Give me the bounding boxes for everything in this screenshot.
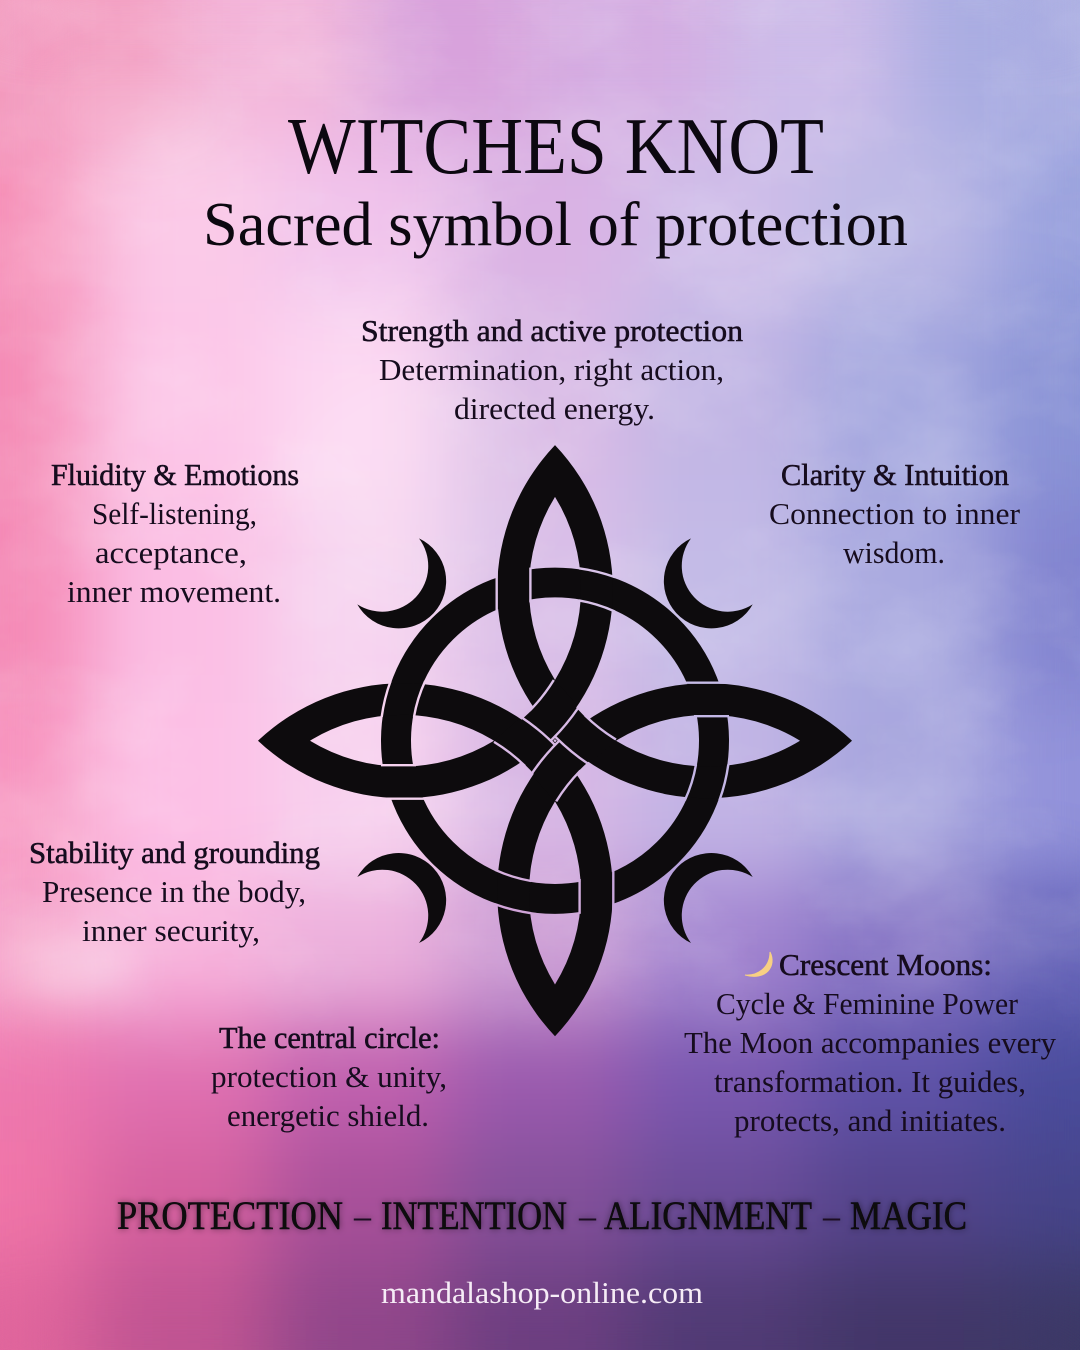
website footer: mandalashop-online.com xyxy=(381,1275,703,1310)
crescent bottom left xyxy=(357,853,446,943)
subtitle: Sacred symbol of protection xyxy=(203,191,908,259)
crescent bottom right xyxy=(664,853,753,943)
text block: clarity xyxy=(769,457,1021,570)
text block: central circle: energetic shield. xyxy=(227,1098,429,1133)
text block: crescent moons: The Moon accompanies every xyxy=(684,1025,1056,1060)
left lens xyxy=(258,683,558,798)
text block: crescent moons: Crescent Moons: xyxy=(779,947,992,982)
text block: crescent moons: protects, and initiates. xyxy=(734,1103,1006,1138)
text block: clarity: Connection to inner xyxy=(769,496,1021,531)
tagline: INTENTION xyxy=(381,1193,567,1238)
text block: fluidity: acceptance, xyxy=(95,535,247,570)
text block: strength: Determination, right action, xyxy=(379,352,724,387)
bottom lens xyxy=(497,738,613,1036)
crescent top left xyxy=(357,538,446,628)
text block: clarity: Clarity & Intuition xyxy=(781,457,1009,492)
text block: strength xyxy=(361,313,744,426)
text block: stability xyxy=(29,835,320,948)
top lens xyxy=(497,445,613,744)
tagline: ALIGNMENT xyxy=(604,1193,812,1238)
text block: fluidity: Fluidity & Emotions xyxy=(51,457,299,492)
text block: stability: Stability and grounding xyxy=(29,835,320,870)
text block: strength: Strength and active protection xyxy=(361,313,744,348)
text block: fluidity: Self-listening, xyxy=(92,496,257,531)
text block: central circle xyxy=(211,1020,447,1133)
tagline xyxy=(117,1193,967,1238)
tagline: – xyxy=(822,1193,841,1238)
icon: crescent moon xyxy=(745,952,772,976)
text block: central circle: protection & unity, xyxy=(211,1059,447,1094)
text block: clarity: wisdom. xyxy=(843,535,945,570)
text block: stability: inner security, xyxy=(82,913,260,948)
crescent top right xyxy=(664,538,753,628)
text block: strength: directed energy. xyxy=(454,391,655,426)
text block: stability: Presence in the body, xyxy=(42,874,306,909)
text block: crescent moons xyxy=(684,947,1056,1138)
right lens xyxy=(552,683,852,798)
witches knot symbol xyxy=(258,445,852,1036)
text block: fluidity: inner movement. xyxy=(67,574,281,609)
text block: crescent moons: transformation. It guides, xyxy=(714,1064,1026,1099)
text block: crescent moons: Cycle & Feminine Power xyxy=(716,986,1019,1021)
text block: fluidity xyxy=(51,457,299,609)
text block: central circle: The central circle: xyxy=(219,1020,440,1055)
title: WITCHES KNOT xyxy=(288,103,824,191)
tagline: MAGIC xyxy=(850,1193,967,1238)
central circle xyxy=(396,582,714,899)
tagline: PROTECTION xyxy=(117,1193,343,1238)
tagline: – xyxy=(578,1193,597,1238)
tagline: – xyxy=(353,1193,372,1238)
